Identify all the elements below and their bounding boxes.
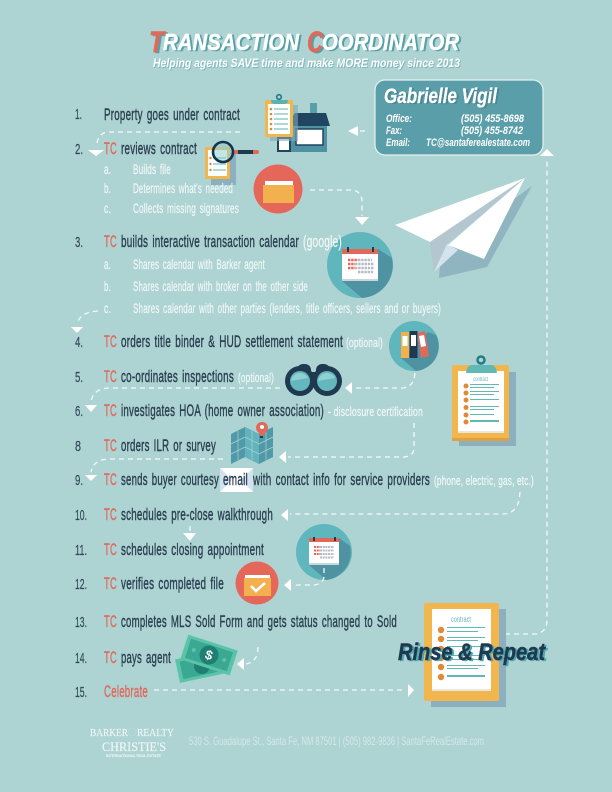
arrow: calendar to verified folder bbox=[284, 568, 324, 591]
step 15: 15. bbox=[75, 684, 87, 701]
footer logo: REALTY bbox=[137, 728, 174, 739]
step 1: 1. bbox=[75, 106, 82, 123]
step 8 bbox=[75, 436, 216, 455]
step 9: (phone, electric, gas, etc.) bbox=[434, 473, 534, 488]
step 2 sub-items: a. bbox=[104, 161, 111, 177]
step 2: TC bbox=[104, 139, 117, 158]
step 2 sub-items: Determines what's needed bbox=[133, 180, 233, 196]
step 8: 8 bbox=[75, 438, 81, 455]
icon: folder bbox=[254, 164, 302, 214]
step 2 sub-items: Collects missing signatures bbox=[133, 200, 239, 216]
step 4 bbox=[75, 332, 383, 351]
arrow: step 9 to step 10 bbox=[281, 492, 520, 521]
step 14 bbox=[75, 648, 171, 667]
step 11: 11. bbox=[75, 542, 87, 559]
icon: contract clipboard bbox=[424, 603, 506, 707]
panel: contact card: Fax: bbox=[386, 125, 402, 137]
panel: contact card: Email: bbox=[386, 137, 410, 149]
icon: binders bbox=[389, 321, 439, 371]
step 11: schedules closing appointment bbox=[121, 540, 264, 559]
step 2 sub-items: b. bbox=[104, 180, 111, 196]
icon: folder with check bbox=[236, 562, 278, 604]
icon: big clipboard bbox=[452, 356, 516, 446]
step 12: 12. bbox=[75, 576, 87, 593]
step 5: TC bbox=[104, 367, 117, 386]
title: OORDINATOR bbox=[322, 29, 459, 55]
step 6: - disclosure certification bbox=[328, 404, 423, 419]
step 9: 9. bbox=[75, 472, 83, 489]
step 11: TC bbox=[104, 540, 117, 559]
icon: money bills: $ bbox=[203, 647, 215, 663]
step 10 bbox=[75, 505, 273, 524]
step 5: 5. bbox=[75, 369, 83, 386]
icon: big clipboard: contract bbox=[473, 377, 488, 383]
arrow: step 1 to step 2 bbox=[88, 132, 240, 156]
step 5: (optional) bbox=[238, 370, 274, 385]
icon: map with pin bbox=[231, 422, 273, 464]
step 6: 6. bbox=[75, 403, 83, 420]
step 12: verifies completed file bbox=[121, 574, 224, 593]
step 8: orders ILR or survey bbox=[121, 436, 216, 455]
footer logo: BARKER bbox=[90, 728, 128, 739]
step 9: with contact info for service providers bbox=[252, 470, 430, 489]
step 3 google note: (google) bbox=[303, 232, 342, 251]
arrow: step 10 to step 11 bbox=[183, 526, 196, 541]
title bbox=[149, 26, 459, 59]
step 6: investigates HOA (home owner association) bbox=[121, 401, 324, 420]
footer logo: CHRISTIE'S bbox=[102, 740, 166, 754]
step 12 bbox=[75, 574, 224, 593]
icon: paper plane bbox=[395, 178, 532, 278]
step 3 sub-items: c. bbox=[104, 300, 111, 316]
step 1 bbox=[75, 105, 240, 124]
panel: contact card: (505) 455-8698 bbox=[461, 113, 525, 125]
arrow: binoculars to step 6 bbox=[85, 388, 280, 412]
step 13: TC bbox=[104, 612, 117, 631]
arrow: step 3 to step 4 bbox=[71, 311, 98, 333]
step 11 bbox=[75, 540, 264, 559]
step 1: Property goes under contract bbox=[104, 105, 240, 124]
icon: calendar bbox=[327, 232, 393, 298]
arrow: certification to map bbox=[279, 423, 414, 463]
step 3: 3. bbox=[75, 234, 83, 251]
step 10: schedules pre-close walkthrough bbox=[121, 505, 273, 524]
step 3 sub-items bbox=[104, 256, 441, 316]
step 13 bbox=[75, 612, 397, 631]
step 2: 2. bbox=[75, 141, 83, 158]
step 3 sub-items: a. bbox=[104, 256, 111, 272]
step 2 sub-items: c. bbox=[104, 200, 111, 216]
icon: money bills bbox=[175, 635, 238, 683]
step 2 sub-items bbox=[104, 161, 239, 216]
panel: contact card: Gabrielle Vigil bbox=[384, 85, 498, 108]
step 15 bbox=[75, 682, 148, 701]
icon: email envelope highlight bbox=[220, 468, 253, 492]
arrow: celebrate to contract bbox=[154, 684, 414, 697]
step 4: (optional) bbox=[346, 335, 383, 350]
arrow: step 8 to step 9 bbox=[85, 459, 223, 481]
step 9: sends buyer courtesy bbox=[121, 470, 219, 489]
icon: house and contract bbox=[265, 95, 330, 152]
step 15: Celebrate bbox=[104, 682, 148, 701]
step 3 sub-items: Shares calendar with Barker agent bbox=[133, 256, 265, 272]
panel: contact card: (505) 455-8742 bbox=[461, 125, 523, 137]
step 8: TC bbox=[104, 436, 117, 455]
title: RANSACTION bbox=[163, 29, 299, 55]
step 13: 13. bbox=[75, 614, 87, 631]
step 3 bbox=[75, 232, 299, 251]
step 14: TC bbox=[104, 648, 117, 667]
step 3: TC bbox=[104, 232, 117, 251]
step 6: TC bbox=[104, 401, 117, 420]
title: C bbox=[307, 26, 324, 59]
step 9: TC bbox=[104, 470, 117, 489]
step 3: builds interactive transaction calendar bbox=[121, 232, 299, 251]
arrow: folder to calendar bbox=[310, 190, 369, 225]
icon: binoculars bbox=[285, 364, 342, 396]
subtitle: Helping agents SAVE time and make MORE money since 2013 bbox=[153, 56, 460, 70]
icon: magnifier over document bbox=[205, 142, 259, 185]
step 10: TC bbox=[104, 505, 117, 524]
step 14: 14. bbox=[75, 650, 87, 667]
footer logo: INTERNATIONAL REAL ESTATE bbox=[106, 754, 162, 758]
step 4: 4. bbox=[75, 334, 83, 351]
arrow: contract back to card bbox=[505, 149, 554, 634]
arrow: binders to binoculars bbox=[345, 373, 415, 394]
step 2 sub-items: Builds file bbox=[133, 161, 171, 177]
step 4: orders title binder & HUD settlement statement bbox=[121, 332, 343, 351]
step 9: email bbox=[223, 470, 248, 489]
panel: contact card: Office: bbox=[386, 113, 412, 125]
step 2 bbox=[75, 139, 197, 158]
arrow: to money bbox=[237, 647, 258, 670]
step 13: completes MLS Sold Form and gets status changed to Sold bbox=[121, 612, 397, 631]
step 3 sub-items: Shares calendar with broker on the other side bbox=[133, 278, 308, 294]
rinse and repeat callout: Rinse & Repeat bbox=[398, 639, 546, 666]
step 2: reviews contract bbox=[121, 139, 197, 158]
step 12: TC bbox=[104, 574, 117, 593]
step 5: co-ordinates inspections bbox=[121, 367, 234, 386]
step 5 bbox=[75, 367, 274, 386]
icon: contract clipboard: contract bbox=[451, 615, 472, 624]
panel: contact card bbox=[375, 80, 543, 155]
step 14: pays agent bbox=[121, 648, 171, 667]
step 3 sub-items: b. bbox=[104, 278, 111, 294]
step 4: TC bbox=[104, 332, 117, 351]
footer logo bbox=[90, 728, 174, 758]
panel: contact card: TC@santaferealestate.com bbox=[426, 137, 530, 149]
step 9 bbox=[75, 470, 534, 489]
step 10: 10. bbox=[75, 507, 87, 524]
title: T bbox=[149, 26, 166, 59]
icon: calendar small bbox=[296, 524, 352, 580]
arrow: card to house bbox=[348, 126, 365, 136]
